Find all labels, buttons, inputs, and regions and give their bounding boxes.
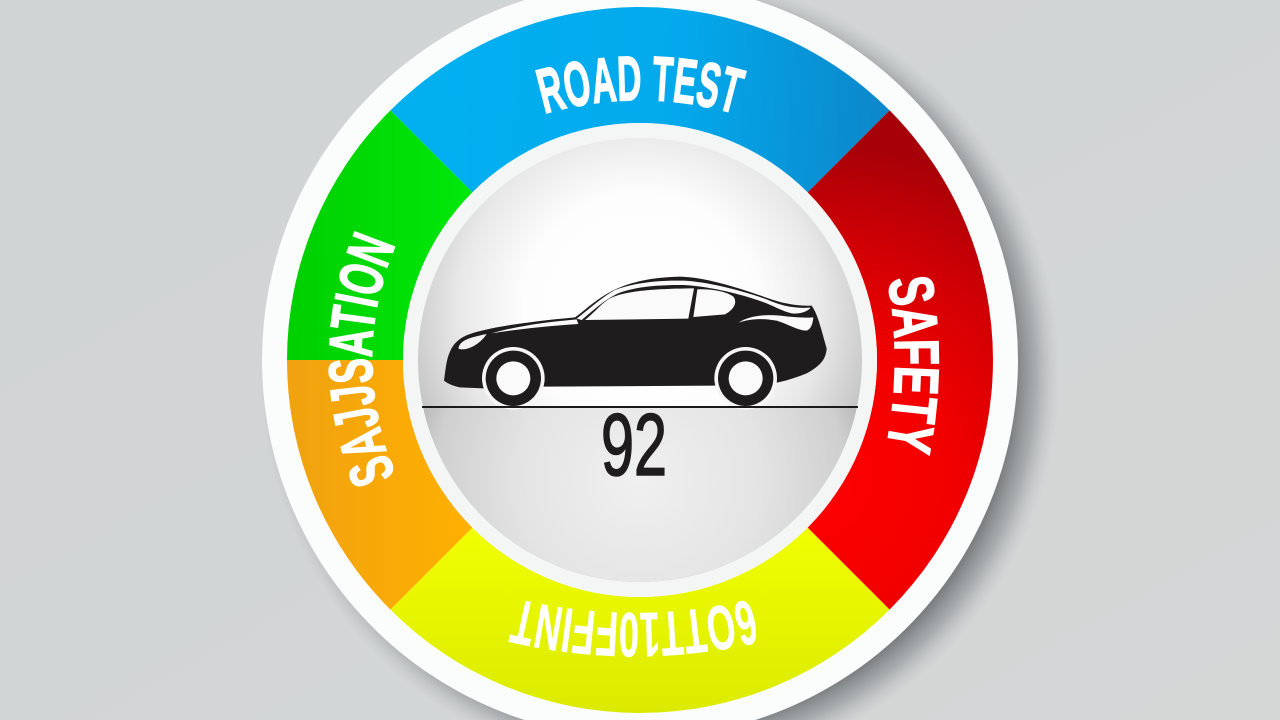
car headlight (458, 334, 487, 349)
rear wheel (714, 347, 777, 410)
segment: green (287, 110, 472, 360)
score number: 92 (601, 395, 667, 494)
car rear window (693, 289, 735, 317)
icon: car (444, 277, 827, 410)
inner white ring (403, 123, 877, 597)
car front window (585, 288, 694, 320)
ground line (422, 406, 858, 408)
badge: white outer disc (262, 0, 1018, 720)
center sphere (418, 138, 862, 582)
drop shadow of badge (260, 0, 1060, 720)
car roof highlight (577, 281, 811, 320)
label: road test: ROAD TEST (535, 56, 747, 114)
label: safety: SAFETY (888, 276, 940, 456)
front wheel (482, 347, 545, 410)
label: left garbled text: SAJJSATION (328, 231, 396, 486)
car body (444, 277, 827, 388)
segment: orange (287, 360, 472, 610)
segment: yellow (390, 528, 890, 713)
car tail light (738, 315, 813, 331)
segment: safety (red) (808, 110, 993, 610)
car hood highlight (492, 319, 578, 333)
label: bottom garbled text: 6OTT10FFINT (508, 600, 756, 658)
segment: road test (blue) (390, 7, 890, 192)
